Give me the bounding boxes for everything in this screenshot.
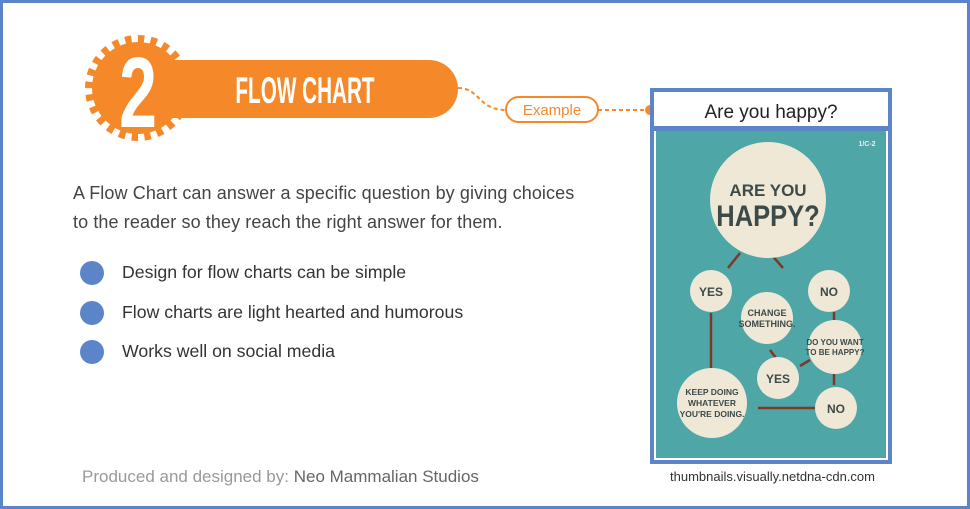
poster: DO YOU WANT <box>806 338 864 347</box>
poster: YOU'RE DOING. <box>680 409 744 419</box>
poster heading: Are you happy? <box>704 102 838 123</box>
source caption: thumbnails.visually.netdna-cdn.com <box>670 469 875 484</box>
poster <box>656 131 886 458</box>
bullet 1 <box>80 261 104 285</box>
intro paragraph <box>73 183 574 232</box>
poster: TO BE HAPPY? <box>806 348 865 357</box>
bullet list: Works well on social media <box>122 341 335 361</box>
poster: NO <box>820 285 838 299</box>
poster: KEEP DOING <box>685 387 739 397</box>
title pill: FLOW CHART <box>235 71 375 112</box>
poster: NO <box>827 402 845 416</box>
bullet 3 <box>80 340 104 364</box>
example label <box>506 97 598 122</box>
poster: YES <box>766 372 790 386</box>
bullet list: Design for flow charts can be simple <box>122 262 406 282</box>
connector dotted line <box>458 88 655 115</box>
bullet 2 <box>80 301 104 325</box>
badge: number 2 starburst: 2 <box>119 38 157 149</box>
poster: CHANGE <box>747 308 787 318</box>
poster: YES <box>699 285 723 299</box>
example label: Example <box>523 102 581 119</box>
intro paragraph: A Flow Chart can answer a specific question by giving choices <box>73 183 574 203</box>
footer credit: Produced and designed by: Neo Mammalian Studios <box>82 467 479 486</box>
bullet list: Flow charts are light hearted and humorous <box>122 302 463 322</box>
title pill <box>118 60 458 118</box>
poster: ARE YOU <box>729 181 807 200</box>
poster: 1/C-2 <box>858 141 876 148</box>
example poster panel <box>650 88 892 464</box>
intro paragraph: to the reader so they reach the right answer for them. <box>73 212 503 232</box>
bullet list <box>80 261 463 364</box>
poster: HAPPY? <box>716 199 820 232</box>
poster: WHATEVER <box>688 398 736 408</box>
poster: SOMETHING. <box>738 319 796 329</box>
badge: number 2 starburst <box>89 38 187 149</box>
